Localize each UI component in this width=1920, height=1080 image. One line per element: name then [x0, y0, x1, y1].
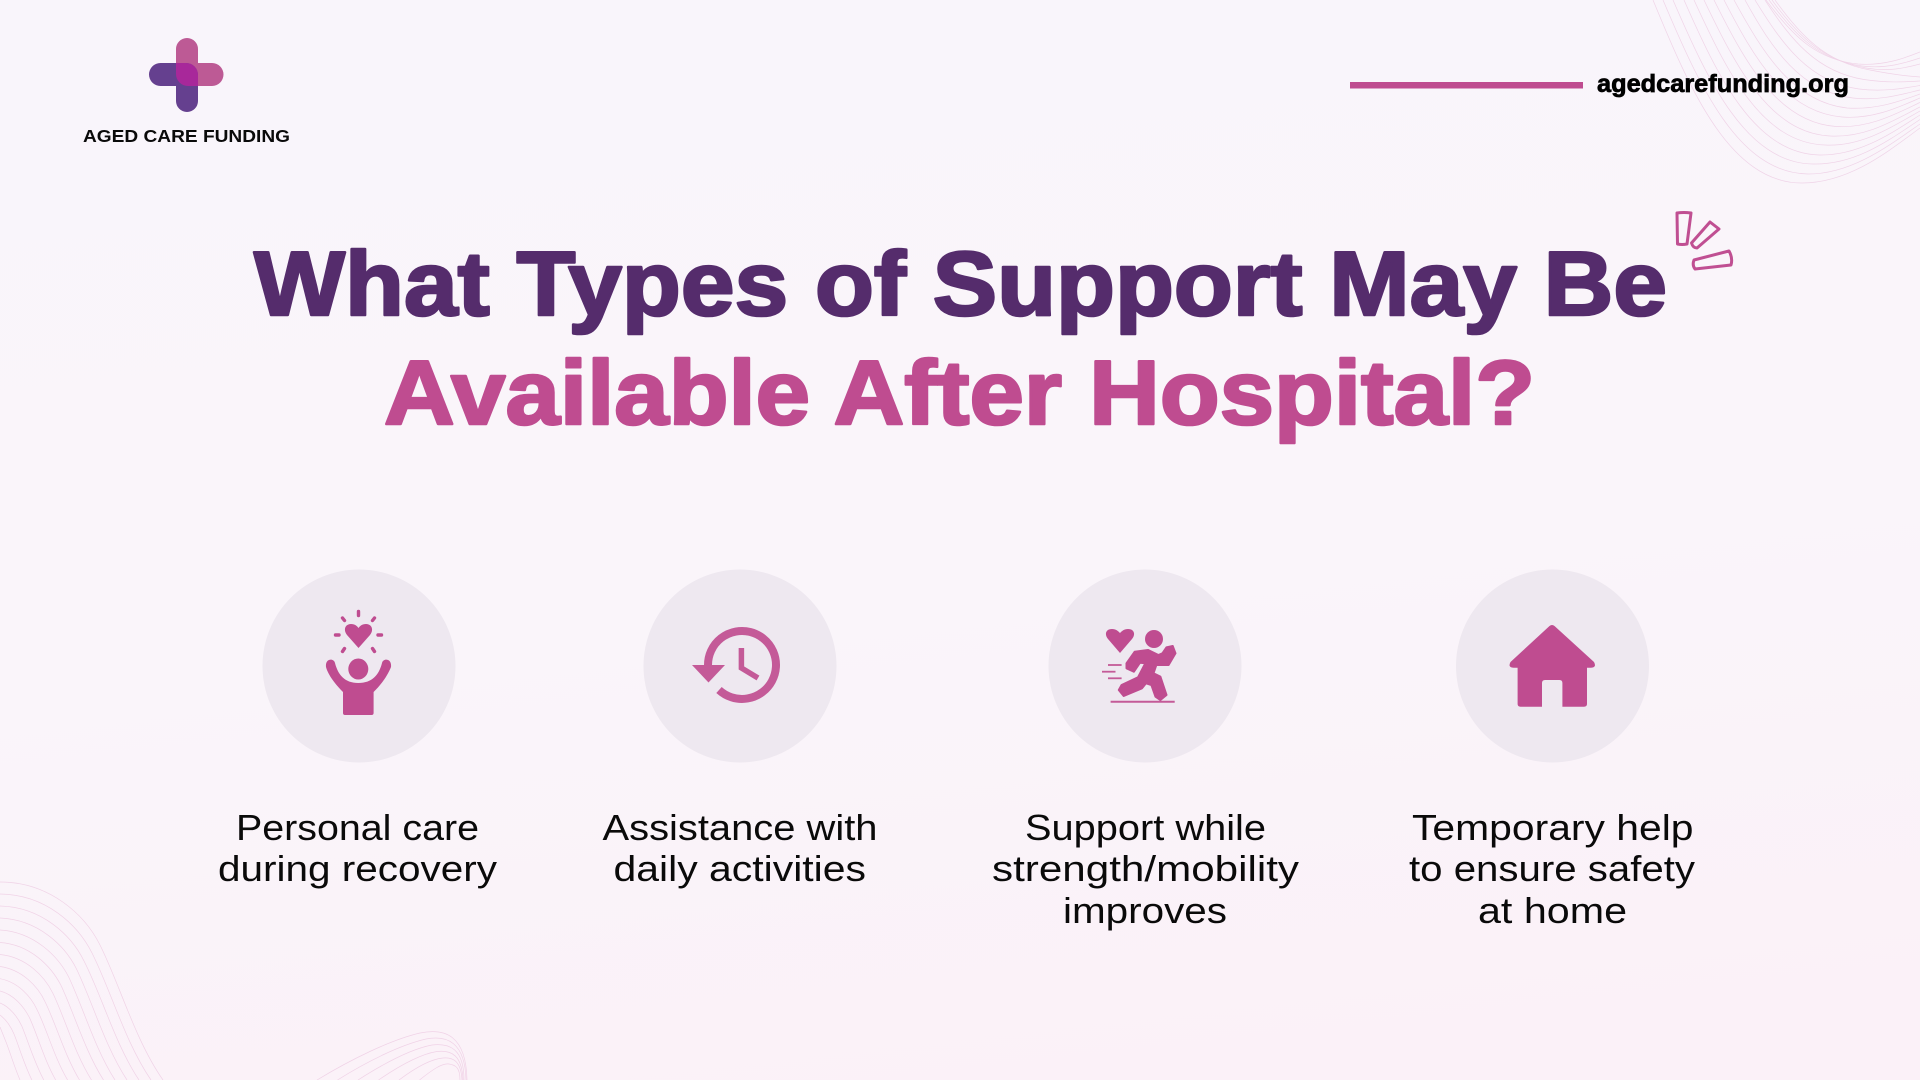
label: Support while	[1025, 807, 1266, 848]
label: Personal care	[236, 807, 479, 848]
decorative wave: bottom centre	[317, 1032, 467, 1080]
icon: person with heart	[326, 612, 391, 715]
icon background circle	[1456, 570, 1649, 762]
label: to ensure safety	[1409, 848, 1695, 889]
label	[602, 807, 878, 889]
label	[1409, 807, 1695, 931]
label: during recovery	[218, 848, 497, 889]
website url: agedcarefunding.org	[1597, 70, 1849, 98]
icon: logo cross	[149, 38, 224, 112]
label	[992, 807, 1299, 931]
label: Temporary help	[1412, 807, 1694, 848]
icon: emphasis sparks	[1677, 212, 1732, 269]
item: daily activities	[602, 570, 878, 889]
item: safety at home	[1409, 570, 1695, 931]
decorative wave: bottom left	[0, 882, 163, 1080]
icon: running person with heart	[1102, 629, 1176, 702]
label: improves	[1063, 890, 1227, 931]
logo: Aged Care Funding	[83, 38, 290, 146]
title line 2: Available After Hospital?	[384, 343, 1535, 444]
label: daily activities	[614, 848, 866, 889]
header divider line	[1350, 82, 1583, 88]
title line 1: What Types of Support May Be	[254, 234, 1667, 335]
icon background circle	[262, 570, 456, 762]
decorative wave: top right	[1653, 0, 1920, 183]
item: personal care	[218, 570, 497, 889]
label	[218, 807, 497, 889]
label: Assistance with	[602, 807, 878, 848]
icon: clock with back arrow	[692, 631, 776, 699]
icon: house	[1510, 625, 1595, 707]
title	[254, 234, 1667, 444]
icon background circle	[644, 570, 836, 762]
logo wordmark: AGED CARE FUNDING	[83, 126, 290, 146]
label: strength/mobility	[992, 848, 1299, 889]
item: strength and mobility	[992, 570, 1299, 931]
label: at home	[1478, 890, 1627, 931]
icon background circle	[1048, 570, 1242, 762]
